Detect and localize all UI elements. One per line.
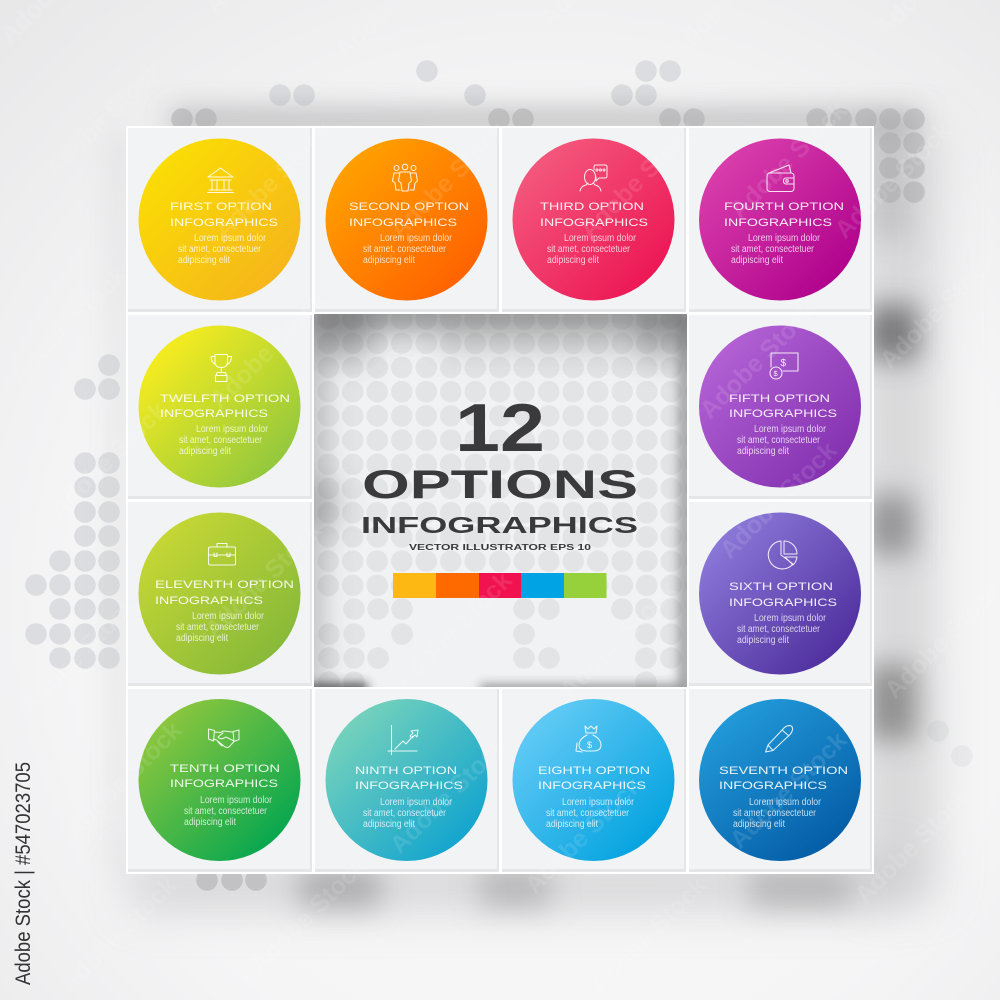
body text: adipiscing elit [731,255,783,266]
title: INFOGRAPHICS [170,778,278,790]
center dot pattern [296,296,700,695]
colour bar [393,573,606,598]
title: FOURTH OPTION [724,201,844,213]
panel: seventh option [689,689,872,872]
title: INFOGRAPHICS [729,597,837,609]
tile [128,502,312,686]
body text [546,797,635,830]
body text: adipiscing elit [179,446,231,457]
watermarks: Adobe Stock [874,246,1000,374]
icon: money bag [576,726,601,752]
body text: adipiscing elit [737,446,789,457]
watermarks: Adobe Stock [574,116,702,244]
circle [699,138,861,300]
title: SIXTH OPTION [729,581,833,593]
body text: Lorem ipsum dolor [380,233,453,244]
watermarks: Adobe Stock [554,576,682,704]
title: THIRD OPTION [540,201,644,213]
watermarks: Adobe Stock [209,116,337,244]
title: SEVENTH OPTION [719,765,848,777]
body text: sit amet, consectetuer [737,435,821,446]
body text: adipiscing elit [546,819,598,830]
body text: Lorem ipsum dolor [754,613,827,624]
title: NINTH OPTION [355,765,457,777]
body text: Lorem ipsum dolor [562,797,635,808]
body text: sit amet, consectetuer [547,244,631,255]
title [729,393,837,420]
background dot map [25,60,973,767]
tile [128,315,312,499]
watermarks: Adobe Stock [39,56,167,184]
watermarks: Adobe Stock [724,96,852,224]
tile [689,128,872,312]
tile [502,128,686,312]
panel: eleventh option [128,502,312,686]
icon: pen [766,726,793,752]
icon: dollar bill [770,353,798,379]
title [155,579,294,607]
body text [179,424,269,457]
panel: third option [502,128,686,312]
body text: adipiscing elit [737,635,789,646]
watermarks: Adobe Stock [714,436,842,564]
title: INFOGRAPHICS [155,595,263,607]
tile [689,502,872,686]
inner shadows [314,314,687,687]
panel: twelfth option [128,315,312,499]
tile [128,128,312,312]
body text: sit amet, consectetuer [731,244,815,255]
panel: fifth option [689,315,872,499]
tile [689,315,872,499]
body text: Lorem ipsum dolor [194,233,267,244]
dots over the frame shadow [171,108,925,891]
icon: growth chart [388,726,418,754]
body text: adipiscing elit [178,255,230,266]
body text [733,797,822,830]
circle [326,138,488,300]
title [719,765,848,792]
icon: wallet [767,165,794,192]
body text: sit amet, consectetuer [179,435,263,446]
body text: Lorem ipsum dolor [564,233,637,244]
heading: options: OPTIONS [362,463,638,507]
watermarks: Adobe Stock [694,296,822,424]
body text: sit amet, consectetuer [546,808,630,819]
body text [184,795,273,828]
panel: fourth option [689,128,872,312]
subheading: VECTOR ILLUSTRATOR EPS 10 [409,542,591,552]
heading: infographics: INFOGRAPHICS [361,512,638,538]
title [170,763,280,790]
title [170,201,278,229]
title [724,201,844,229]
body text: Lorem ipsum dolor [754,424,827,435]
outer frame shadows [110,112,938,910]
body text: adipiscing elit [363,819,415,830]
title: INFOGRAPHICS [540,217,648,229]
heading: 12: 12 [455,390,545,466]
tile [315,689,499,872]
body text: adipiscing elit [363,255,415,266]
body text: sit amet, consectetuer [737,624,821,635]
panel: sixth option [689,502,872,686]
panel: center [296,296,700,695]
icon: user with speech bubble [580,165,607,191]
panel: eighth option [502,689,686,872]
title: SECOND OPTION [349,201,469,213]
body text [363,233,453,266]
title: INFOGRAPHICS [719,780,827,792]
body text [178,233,267,266]
title: TENTH OPTION [170,763,280,775]
panel: tenth option [128,689,312,872]
body text: sit amet, consectetuer [184,806,268,817]
icon: dollar bill: $ [780,358,786,369]
panel: first option [128,128,312,312]
title: ELEVENTH OPTION [155,579,294,591]
watermarks: Adobe Stock [199,516,327,644]
icon: pie chart [768,541,797,569]
body text: Lorem ipsum dolor [200,795,273,806]
title: INFOGRAPHICS [349,217,457,229]
body text: sit amet, consectetuer [363,808,447,819]
title [355,765,463,792]
circle [138,512,300,674]
body text: Lorem ipsum dolor [748,233,821,244]
body text: adipiscing elit [547,255,599,266]
title: INFOGRAPHICS [538,780,646,792]
body text: Lorem ipsum dolor [192,611,265,622]
circle [699,699,861,861]
watermarks: Adobe Stock [204,286,332,414]
watermarks: Adobe Stock [59,716,187,844]
panel: second option [315,128,499,312]
title: INFOGRAPHICS [724,217,832,229]
body text [547,233,637,266]
watermarks: Adobe Stock [244,851,372,979]
watermarks: Adobe Stock [4,261,132,389]
body text: adipiscing elit [733,819,785,830]
title: TWELFTH OPTION [160,393,290,405]
body text [737,613,827,646]
watermarks: Adobe Stock [389,566,517,694]
frame base [126,126,874,874]
circle [699,512,861,674]
icon: money bag: $ [587,740,592,750]
title: FIRST OPTION [170,201,272,213]
body text: sit amet, consectetuer [176,622,260,633]
watermarks: Adobe Stock [829,116,957,244]
body text [176,611,265,644]
body text: Lorem ipsum dolor [196,424,269,435]
panel: ninth option [315,689,499,872]
watermarks: Adobe Stock [519,771,647,899]
circle [138,699,300,861]
icon: briefcase [208,544,236,565]
title [160,393,290,420]
watermarks: Adobe Stock [14,591,142,719]
tile [502,689,686,872]
icon: bank [208,168,234,192]
circle [512,699,674,861]
title: FIFTH OPTION [729,393,830,405]
watermarks: Adobe Stock [724,726,852,854]
watermarks: Adobe Stock [384,116,512,244]
icon: people [392,164,418,191]
center background [314,314,687,687]
circle [326,699,488,861]
tile [689,689,872,872]
title: INFOGRAPHICS [729,408,837,420]
body text: sit amet, consectetuer [363,244,447,255]
title: INFOGRAPHICS [355,780,463,792]
watermarks: Adobe Stock [584,871,712,999]
circle [512,138,674,300]
icon: handshake [208,729,239,748]
title: INFOGRAPHICS [160,408,268,420]
circle [138,326,300,488]
title [729,581,837,609]
watermarks: Adobe Stock [44,396,172,524]
icon: dollar bill: $ [774,369,778,378]
body text: sit amet, consectetuer [178,244,262,255]
watermarks: Adobe Stock [384,731,512,859]
stock id label: Adobe Stock | #547023705 [12,762,35,985]
icon: trophy [211,354,232,382]
body text [731,233,821,266]
title [540,201,648,229]
title: EIGHTH OPTION [538,765,650,777]
body text [363,797,453,830]
body text: Lorem ipsum dolor [380,797,453,808]
body text [737,424,827,457]
watermarks: Adobe Stock [849,781,977,909]
title [538,765,650,792]
tile [128,689,312,872]
body text: sit amet, consectetuer [733,808,817,819]
title [349,201,469,229]
tile [315,128,499,312]
body text: adipiscing elit [176,633,228,644]
body text: adipiscing elit [184,817,236,828]
body text: Lorem ipsum dolor [749,797,822,808]
circle [699,326,861,488]
watermarks: Adobe Stock [54,871,182,999]
title: INFOGRAPHICS [170,217,278,229]
circle [138,138,300,300]
